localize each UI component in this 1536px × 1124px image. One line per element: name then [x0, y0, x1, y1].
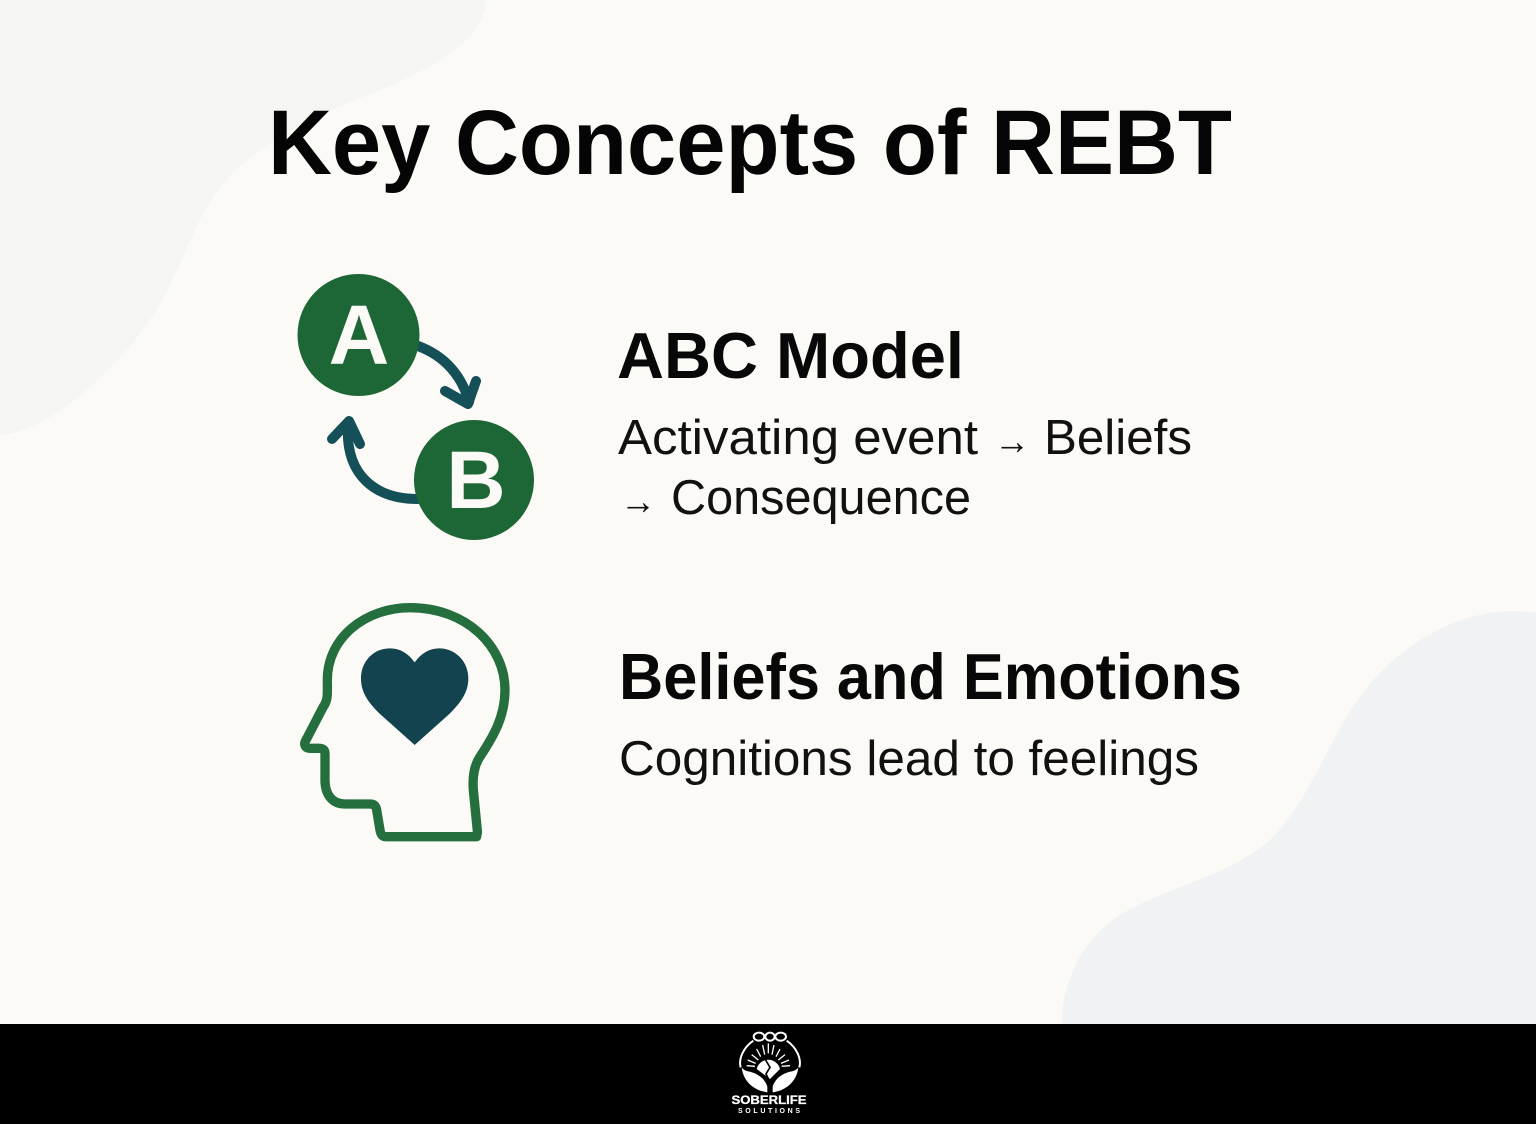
logo: chain links — [754, 1033, 786, 1041]
logo: hands — [742, 1067, 798, 1092]
text: ABC description line 1: Activating event — [618, 411, 978, 465]
icon: head with heart — [305, 608, 505, 837]
text: ABC description line 1: Beliefs — [1044, 411, 1192, 465]
logo: tagline: SOLUTIONS — [738, 1108, 800, 1115]
text: ABC description line 2: → — [620, 481, 656, 523]
footer bar — [0, 1024, 1536, 1124]
circle A: A — [329, 288, 389, 382]
arrow: A to B — [418, 346, 476, 404]
icon: ABC cycle — [298, 274, 534, 540]
circle B — [414, 420, 534, 540]
logo: wordmark: SOBERLIFE — [732, 1093, 806, 1107]
logo: emblem — [740, 1033, 800, 1092]
logo: centre line — [765, 1059, 771, 1092]
circle B: B — [446, 435, 506, 526]
head outline — [305, 608, 505, 837]
text: ABC description line 1 — [618, 411, 1192, 465]
text: ABC description line 1: → — [994, 421, 1030, 463]
logo: sun — [757, 1060, 780, 1079]
logo: ring — [740, 1041, 800, 1067]
footer logo — [732, 1033, 806, 1115]
logo: sun rays — [747, 1043, 790, 1066]
heading: Beliefs and Emotions: Beliefs and Emotions — [619, 640, 1242, 713]
arrow: B to A — [332, 421, 418, 499]
circle A — [298, 274, 420, 396]
text: ABC description line 2: Consequence — [671, 471, 971, 525]
heading: ABC Model: ABC Model — [617, 319, 964, 392]
background blob: bottom right — [1062, 611, 1536, 1024]
background blob: top left — [0, 0, 487, 436]
text: Beliefs description: Cognitions lead to feelings — [619, 732, 1199, 786]
heart — [361, 648, 468, 745]
title: Key Concepts of REBT — [268, 92, 1232, 194]
